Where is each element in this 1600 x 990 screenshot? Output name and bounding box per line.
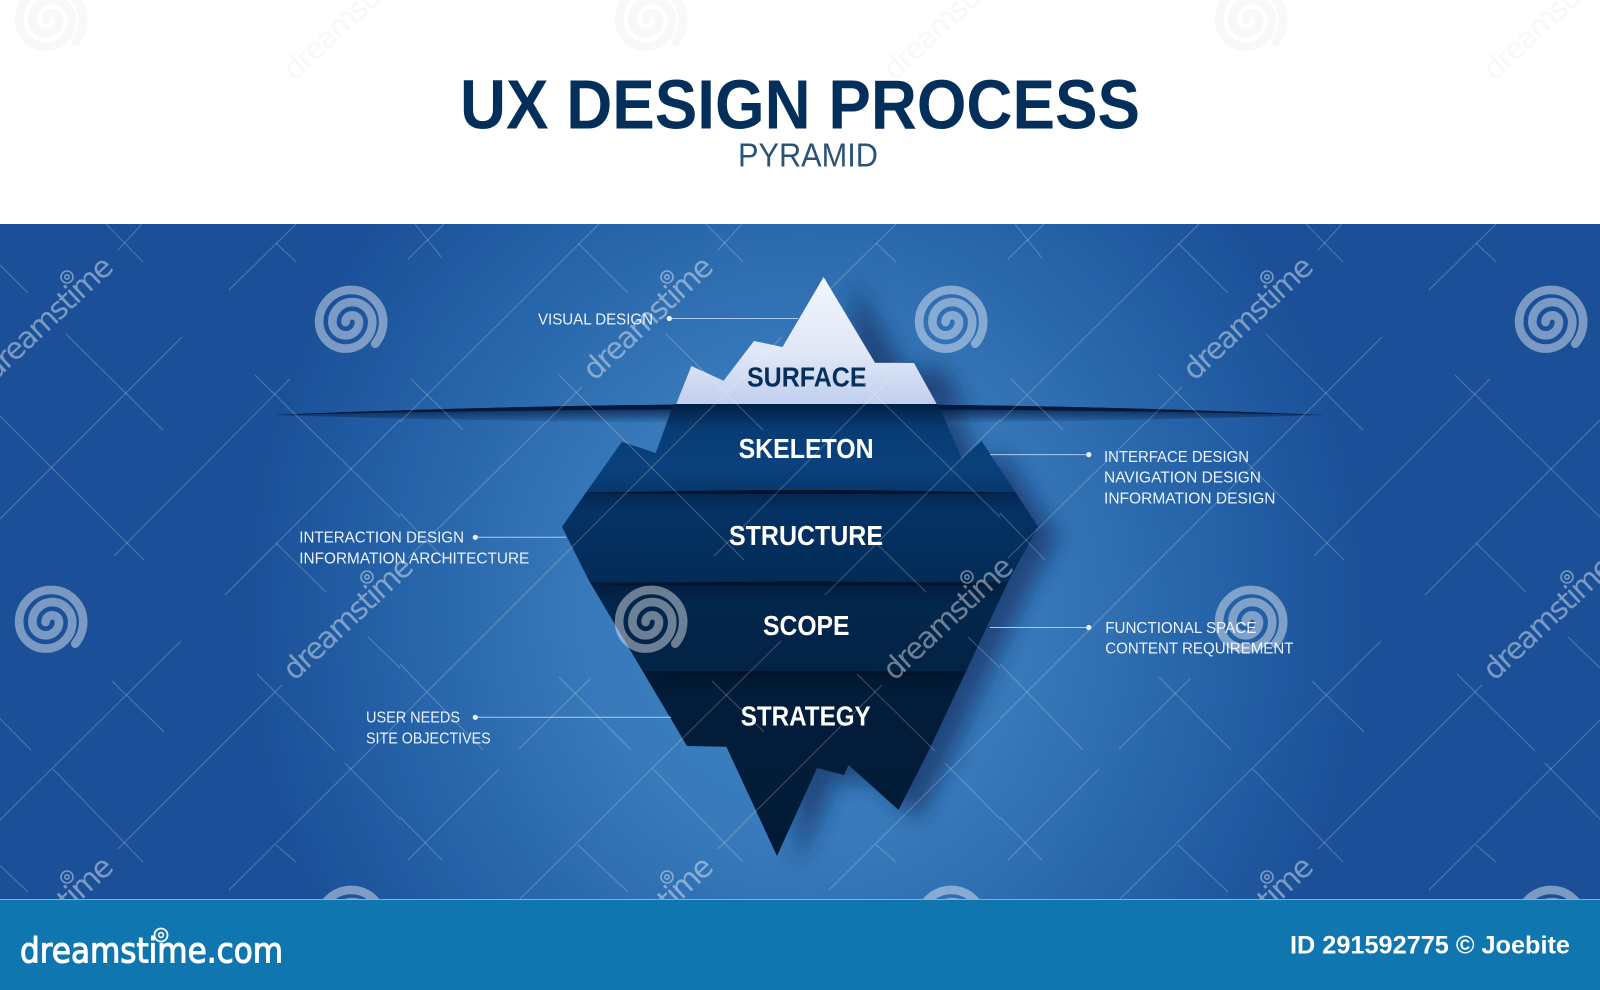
watermark overlay: dreamstime — [1176, 849, 1321, 987]
iceberg — [550, 277, 1050, 861]
callout: functional space, content requirement — [990, 620, 1294, 657]
subtitle: PYRAMID — [738, 136, 878, 174]
faint watermarks on header — [19, 0, 1600, 87]
watermark overlay: dreamstime — [276, 549, 421, 687]
underwater layers — [550, 404, 1050, 861]
watermark overlay: dreamstime — [1176, 249, 1321, 387]
layer label: structure: STRUCTURE — [729, 520, 883, 551]
callout: interface, navigation, information design: INFORMATION DESIGN — [1104, 490, 1276, 507]
callout: user needs, site objectives — [366, 710, 671, 748]
callout: interaction design, information architecture — [299, 529, 566, 567]
callout: visual design — [538, 311, 798, 328]
watermark overlay: dreamstime — [876, 549, 1021, 687]
layer label: strategy: STRATEGY — [741, 701, 871, 732]
callout: functional space, content requirement: CONTENT REQUIREMENT — [1105, 640, 1294, 657]
callout: interface, navigation, information design: NAVIGATION DESIGN — [1104, 470, 1261, 487]
callout: interface, navigation, information design: INTERFACE DESIGN — [1104, 449, 1249, 466]
waterline — [273, 404, 1325, 423]
watermark overlay — [0, 224, 1600, 899]
callout: visual design: VISUAL DESIGN — [538, 311, 653, 328]
ocean background panel — [0, 224, 1600, 900]
title: UX DESIGN PROCESS — [460, 66, 1140, 144]
watermark overlay: dreamstime — [576, 249, 721, 387]
callout: interaction design, information architecture: INFORMATION ARCHITECTURE — [299, 550, 529, 567]
callout: interaction design, information architecture: INTERACTION DESIGN — [299, 529, 464, 546]
surface layer above water — [676, 277, 937, 404]
callout: functional space, content requirement: FUNCTIONAL SPACE — [1105, 620, 1256, 637]
callout: interface, navigation, information design — [990, 449, 1276, 507]
footer logo: dreamstime.com — [20, 932, 283, 972]
watermark overlay: dreamstime — [576, 849, 721, 987]
iceberg drop shadow — [790, 283, 1058, 866]
footer bar — [0, 899, 1600, 990]
layer label: scope: SCOPE — [763, 610, 850, 641]
footer image id: ID 291592775 © Joebite — [1290, 931, 1570, 959]
layer label: surface: SURFACE — [747, 362, 866, 393]
header background — [0, 0, 1600, 224]
layer label: skeleton: SKELETON — [739, 433, 874, 464]
callout: user needs, site objectives: SITE OBJECTIVES — [366, 730, 491, 748]
callout: user needs, site objectives: USER NEEDS — [366, 710, 460, 727]
